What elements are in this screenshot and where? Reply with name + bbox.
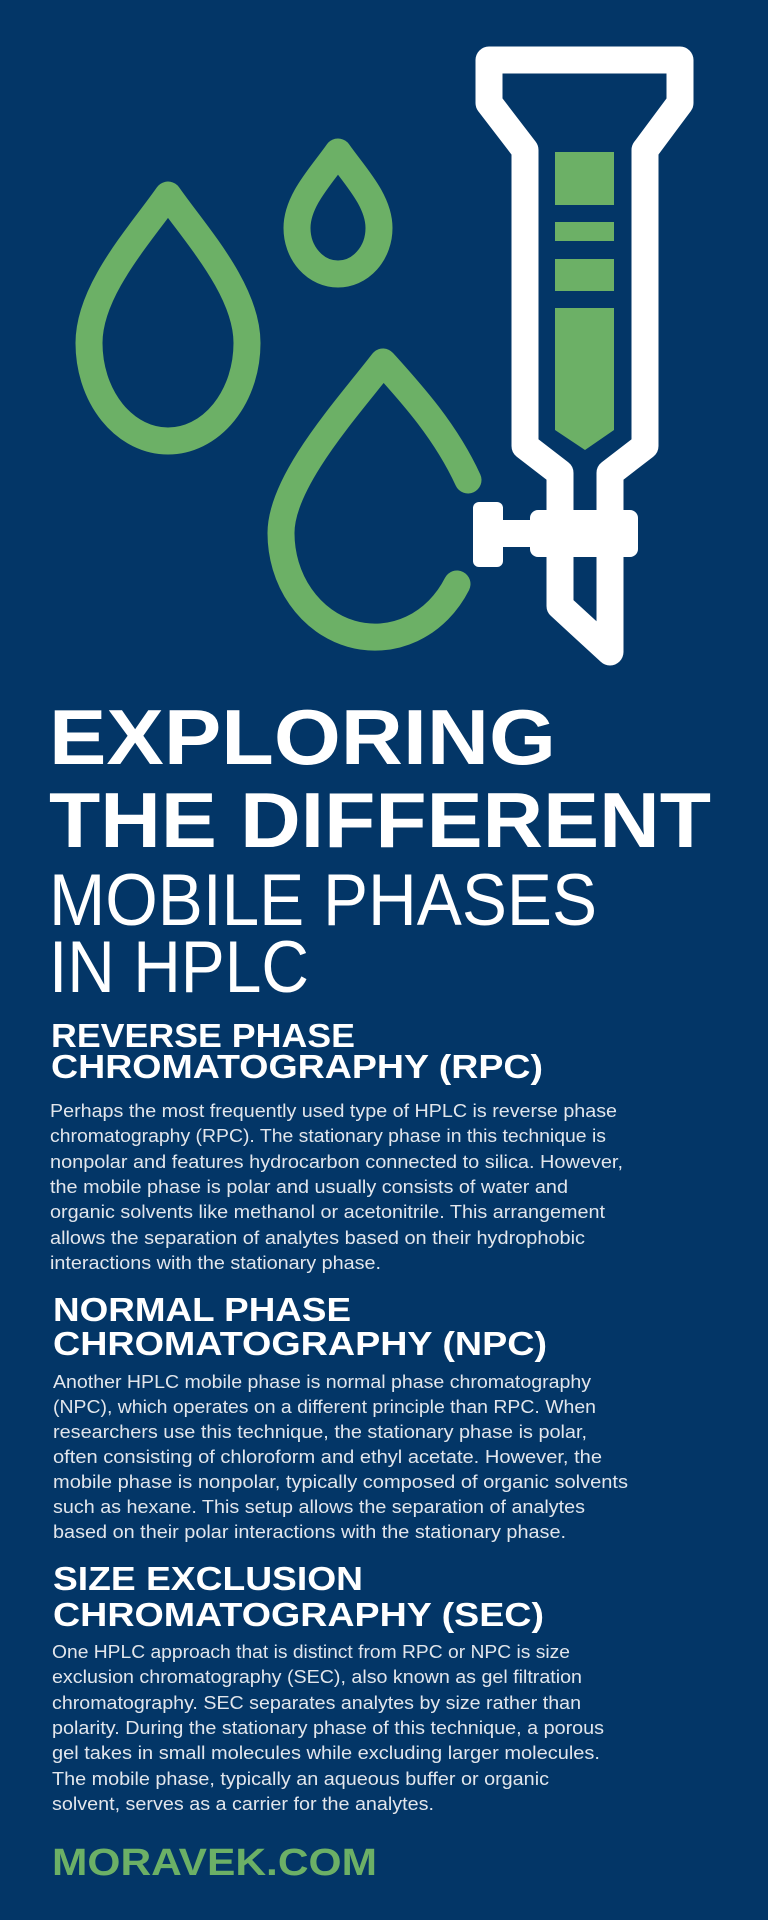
text block: NPC: Another HPLC mobile phase is normal phase chromatography (53, 1372, 591, 1392)
text block: RPC: the mobile phase is polar and usually consists of water and (50, 1177, 568, 1197)
icon: chromatography column (473, 60, 680, 652)
text block: NPC: mobile phase is nonpolar, typically composed of organic solvents (53, 1472, 628, 1492)
text block: SEC: One HPLC approach that is distinct from RPC or NPC is size (52, 1642, 570, 1662)
title (49, 693, 711, 1008)
heading: size exclusion: SIZE EXCLUSION (53, 1560, 363, 1597)
heading: reverse phase: CHROMATOGRAPHY (RPC) (51, 1048, 543, 1085)
text block: SEC: gel takes in small molecules while excluding larger molecules. (52, 1743, 600, 1763)
icon: open water drop (281, 362, 468, 637)
text block: RPC: allows the separation of analytes based on their hydrophobic (50, 1228, 585, 1248)
text block: RPC: nonpolar and features hydrocarbon connected to silica. However, (50, 1152, 623, 1172)
text block: SEC: chromatography. SEC separates analytes by size rather than (52, 1693, 581, 1713)
heading: reverse phase (51, 1017, 543, 1085)
text block: NPC: based on their polar interactions with the stationary phase. (53, 1522, 566, 1542)
text block: NPC: often consisting of chloroform and ethyl acetate. However, the (53, 1447, 602, 1467)
heading: normal phase (53, 1291, 547, 1362)
heading: size exclusion (53, 1560, 544, 1633)
icon: large water drop (89, 195, 247, 441)
icon: small water drop (297, 152, 379, 274)
text block: RPC: chromatography (RPC). The stationary phase in this technique is (50, 1126, 606, 1146)
text block: SEC: The mobile phase, typically an aqueous buffer or organic (52, 1769, 549, 1789)
text block: NPC: researchers use this technique, the stationary phase is polar, (53, 1422, 587, 1442)
title: MOBILE PHASES (49, 860, 597, 941)
text block: RPC (50, 1101, 623, 1273)
heading: normal phase: NORMAL PHASE (53, 1291, 351, 1328)
text block: NPC (53, 1372, 628, 1542)
text block: NPC: such as hexane. This setup allows the separation of analytes (53, 1497, 585, 1517)
text block: RPC: Perhaps the most frequently used type of HPLC is reverse phase (50, 1101, 617, 1121)
title: THE DIFFERENT (49, 776, 711, 864)
title: IN HPLC (49, 927, 309, 1008)
title: EXPLORING (49, 693, 556, 781)
heading: reverse phase: REVERSE PHASE (51, 1017, 355, 1054)
heading: normal phase: CHROMATOGRAPHY (NPC) (53, 1325, 547, 1362)
text block: RPC: organic solvents like methanol or acetonitrile. This arrangement (50, 1202, 605, 1222)
text block: SEC: exclusion chromatography (SEC), also known as gel filtration (52, 1667, 582, 1687)
text block: RPC: interactions with the stationary phase. (50, 1253, 381, 1273)
text block: SEC: polarity. During the stationary phase of this technique, a porous (52, 1718, 604, 1738)
text block: NPC: (NPC), which operates on a different principle than RPC. When (53, 1397, 596, 1417)
footer: website: MORAVEK.COM (52, 1842, 377, 1884)
text block: SEC (52, 1642, 604, 1814)
text block: SEC: solvent, serves as a carrier for the analytes. (52, 1794, 434, 1814)
heading: size exclusion: CHROMATOGRAPHY (SEC) (53, 1596, 544, 1633)
